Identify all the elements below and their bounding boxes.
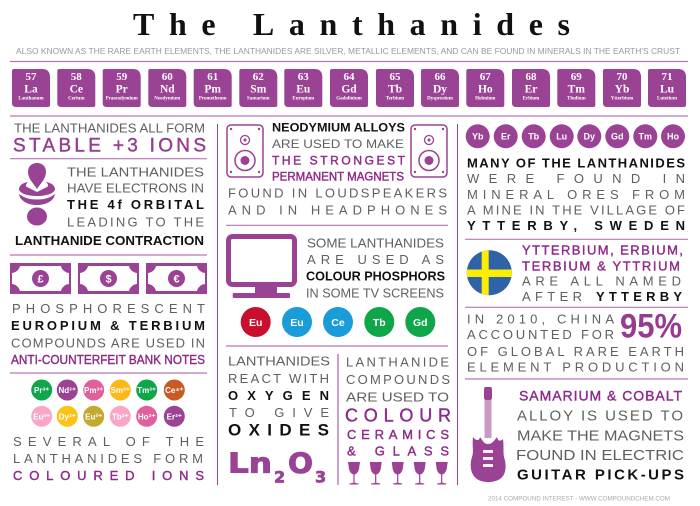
formula: Ln2O3: 3 [315,468,326,487]
text: colour phosphors: IN SOME TV SCREENS [306,286,444,301]
icon: dollar note [78,263,139,294]
tile: Lu: 71 [662,71,672,83]
icon: left speaker [227,125,263,177]
panel: stable ions [13,120,206,157]
text: oxides [228,354,330,440]
tile: La: Lanthanum [18,96,44,102]
icon: pound note: £ [37,274,44,286]
tile: Er [512,69,550,107]
text: colour ceramics and glass: CERAMICS [347,427,449,442]
coloured ion circles: Dy³⁺ [59,412,76,421]
text: neodymium magnets [228,121,447,217]
text: colour ceramics and glass: ARE USED TO [346,390,449,405]
text: ytterby mine: MINERAL ORES FROM [467,187,685,202]
tile: Ce: Cerium [68,96,85,102]
icon: euro note: € [173,274,180,286]
text: guitar magnets: MAKE THE MAGNETS [517,427,684,444]
tile: Pm: 61 [207,71,218,83]
text: coloured ions [13,434,204,483]
tile: Eu: 63 [298,71,309,83]
text: guitar magnets: SAMARIUM & COBALT [519,388,682,404]
tile: Ce: 58 [71,71,82,83]
coloured ion circles: Er³⁺ [167,412,182,421]
formula: Ln2O3 [228,447,326,487]
tile: Gd: 64 [344,71,355,83]
periodic table tiles [12,69,686,107]
tile: Er: 68 [526,71,537,83]
text: colour ceramics and glass: LANTHANIDE [346,355,449,370]
tile: La: La [24,84,38,96]
text: colour ceramics and glass: COMPOUNDS [346,372,450,387]
ytterby element circles: Yb [472,132,484,142]
tile: Ce [57,69,95,107]
tile: Nd: Nd [160,84,175,96]
ytterby element circles: Tm [639,132,652,142]
text: coloured ions: COLOURED IONS [13,468,204,483]
tile: Lu: Lutetium [657,96,678,102]
tile: Er: Er [525,84,537,96]
icon: f orbital [19,163,55,226]
text: colour phosphors [306,236,445,301]
text: ytterby mine: YTTERBY, SWEDEN [467,218,685,233]
tile: La [12,69,50,107]
subtitle: ALSO KNOWN AS THE RARE EARTH ELEMENTS, THE LANTHANIDES ARE SILVER, METALLIC ELEMENTS, AND CAN BE FOUND IN MINERALS IN THE EARTH'S CRUST [16,46,680,56]
icon: electric guitar [471,387,506,482]
tile: Tb [376,69,414,107]
coloured ion circles: Tb³⁺ [112,412,129,421]
tile: Pr: 59 [116,71,128,83]
text: bank notes: ANTI-COUNTERFEIT BANK NOTES [11,352,205,367]
ytterby element circles: Ho [667,132,679,142]
tile: Lu [648,69,686,107]
text: neodymium magnets: NEODYMIUM ALLOYS [272,121,405,135]
coloured ion circles: Ho³⁺ [138,412,155,421]
ytterby element circles [466,124,685,148]
tile: Pm: Prometheum [199,96,227,102]
title: The Lanthanides [133,6,570,42]
text: guitar magnets: FOUND IN ELECTRIC [516,447,684,464]
text: china production: ELEMENT PRODUCTION [467,360,684,375]
coloured ion circles: Tm³⁺ [137,386,156,395]
text: named after ytterby: YTTERBY [596,289,682,304]
footer credit: 2014 COMPOUND INTEREST - WWW.COMPOUNDCHEM.COM [488,496,670,503]
text: china production: OF GLOBAL RARE EARTH [467,344,684,359]
coloured ion circles: Eu³⁺ [33,412,50,421]
text: neodymium magnets: AND IN HEADPHONES [228,202,447,217]
tile: Nd: 60 [162,71,173,83]
formula: Ln2O3: Ln [228,447,272,480]
text: colour ceramics and glass [345,355,451,459]
tile: Gd [330,69,368,107]
text: bank notes: EUROPIUM & TERBIUM [11,318,205,333]
phosphor element circles: Ce [331,317,345,329]
tile: Tm: Tm [568,84,585,96]
coloured ion circles [31,380,185,427]
text: neodymium magnets: FOUND IN LOUDSPEAKERS [228,186,447,201]
text: named after ytterby: YTTERBIUM, ERBIUM, [522,242,683,257]
icon: swedish flag [466,250,513,296]
tile: Yb [603,69,641,107]
text: 4f orbital: THE LANTHANIDES [67,165,204,180]
tile: Sm: Sm [250,84,267,96]
text: named after ytterby: ARE ALL NAMED [522,274,681,289]
text: named after ytterby: AFTER [522,289,582,304]
tile: Pr [103,69,141,107]
tile: Tb: Terbium [386,96,405,102]
icon: wine glasses [348,462,448,484]
icon: tv screen [228,236,294,298]
coloured ion circles: Eu²⁺ [85,412,102,421]
text: guitar magnets: ALLOY IS USED TO [517,408,683,425]
tile: Sm [239,69,277,107]
text: ytterby mine: MANY OF THE LANTHANIDES [467,155,685,170]
tile: Ho: Ho [478,84,493,96]
tile: Nd [148,69,186,107]
text: neodymium magnets: PERMANENT MAGNETS [272,170,404,184]
phosphor element circles [241,307,435,337]
text: oxides: OXYGEN [228,388,329,403]
icon: pound note [10,263,71,294]
tile: Ce: Ce [70,84,83,96]
tile: Eu: Eu [296,84,311,96]
phosphor element circles: Gd [413,317,428,329]
tile: Tb: Tb [388,84,402,96]
formula: Ln2O3: O [288,447,313,480]
text: guitar magnets: GUITAR PICK-UPS [517,466,684,483]
formula: Ln2O3: 2 [274,468,285,487]
coloured ion circles: Pm³⁺ [84,386,103,395]
text: colour phosphors: SOME LANTHANIDES [307,236,444,251]
tile: Lu: Lu [660,84,675,96]
text: 4f orbital: LANTHANIDE CONTRACTION [15,233,204,248]
tile: Er: Erbium [523,96,540,102]
text: china production: ACCOUNTED FOR [467,327,614,342]
panel: stable ions: STABLE +3 IONS [13,136,206,157]
tile: Sm: 62 [253,71,264,83]
tile: Tm [557,69,595,107]
coloured ion circles: Nd³⁺ [59,386,76,395]
ytterby element circles: Tb [528,132,540,142]
tile: Yb: 70 [616,71,628,83]
tile: Dy: Dy [433,84,447,96]
panel: stable ions: THE LANTHANIDES ALL FORM [14,120,205,135]
tile: Eu: Europium [292,96,315,102]
text: coloured ions: LANTHANIDES FORM [13,451,203,466]
tile: Sm: Samarium [247,96,270,102]
ytterby element circles: Gd [611,132,624,142]
tile: Yb: Yb [615,84,629,96]
ytterby element circles: Lu [556,132,567,142]
text: 4f orbital: HAVE ELECTRONS IN [67,181,204,196]
phosphor element circles: Eu [290,317,304,329]
tile: Pm [194,69,232,107]
text: colour phosphors: ARE USED AS [307,252,444,267]
tile: Nd: Neodymium [154,96,181,102]
tile: Pm: Pm [204,84,221,96]
tile: Yb: Ytterbium [611,96,634,102]
text: neodymium magnets: THE STRONGEST [272,153,406,167]
tile: Gd: Gadolinium [336,96,363,102]
tile: Gd: Gd [341,84,357,96]
tile: Tm: Thulium [567,96,586,102]
text: oxides: REACT WITH [228,371,329,386]
text: oxides: OXIDES [228,421,329,440]
text: 4f orbital: LEADING TO THE [67,215,204,230]
text: colour ceramics and glass: COLOUR [345,406,451,426]
text: ytterby mine [467,155,685,233]
icon: bank notes [10,263,207,294]
icon: right speaker [411,125,447,177]
text: 4f orbital [15,165,204,248]
text: oxides: LANTHANIDES [228,354,330,369]
tile: Tb: 65 [390,71,401,83]
tile: Tm: 69 [571,71,582,83]
ytterby element circles: Dy [584,132,595,142]
tile: Eu [284,69,322,107]
phosphor element circles: Tb [373,317,386,329]
text: colour phosphors: COLOUR PHOSPHORS [306,269,445,284]
icon: dollar note: $ [105,274,112,286]
coloured ion circles: Ce⁴⁺ [165,386,184,395]
icon: euro note [146,263,207,294]
text: oxides: TO GIVE [229,405,329,420]
text: china production [467,311,684,375]
tile: Ho: 67 [480,71,491,83]
text: neodymium magnets: ARE USED TO MAKE [272,137,404,151]
phosphor element circles: Eu [249,317,262,329]
tile: Dy: Dysprosium [427,96,454,102]
coloured ion circles: Pr³⁺ [34,386,49,395]
coloured ion circles: Sm³⁺ [111,386,130,395]
text: 4f orbital: THE 4f ORBITAL [67,197,204,212]
text: china production: IN 2010, CHINA [467,311,614,326]
tile: La: 57 [26,71,37,83]
text: ytterby mine: A MINE IN THE VILLAGE OF [467,202,685,217]
stat: 95%: 95% [620,307,682,345]
text: coloured ions: SEVERAL OF THE [13,434,204,449]
tile: Ho: Holmium [475,96,496,102]
tile: Ho [466,69,504,107]
tile: Dy: 66 [434,71,446,83]
tile: Dy [421,69,459,107]
text: bank notes: COMPOUNDS ARE USED IN [11,336,205,351]
tile: Pr: Pr [116,84,128,96]
ytterby element circles: Er [501,132,511,142]
text: ytterby mine: WERE FOUND IN [467,171,685,186]
text: named after ytterby: TERBIUM & YTTRIUM [522,258,680,273]
text: bank notes: PHOSPHORESCENT [12,301,205,316]
text: guitar magnets [516,388,684,483]
tile: Pr: Praseodymium [106,96,139,102]
text: named after ytterby [522,242,683,304]
text: colour ceramics and glass: & GLASS [347,444,449,459]
text: bank notes [11,301,205,367]
